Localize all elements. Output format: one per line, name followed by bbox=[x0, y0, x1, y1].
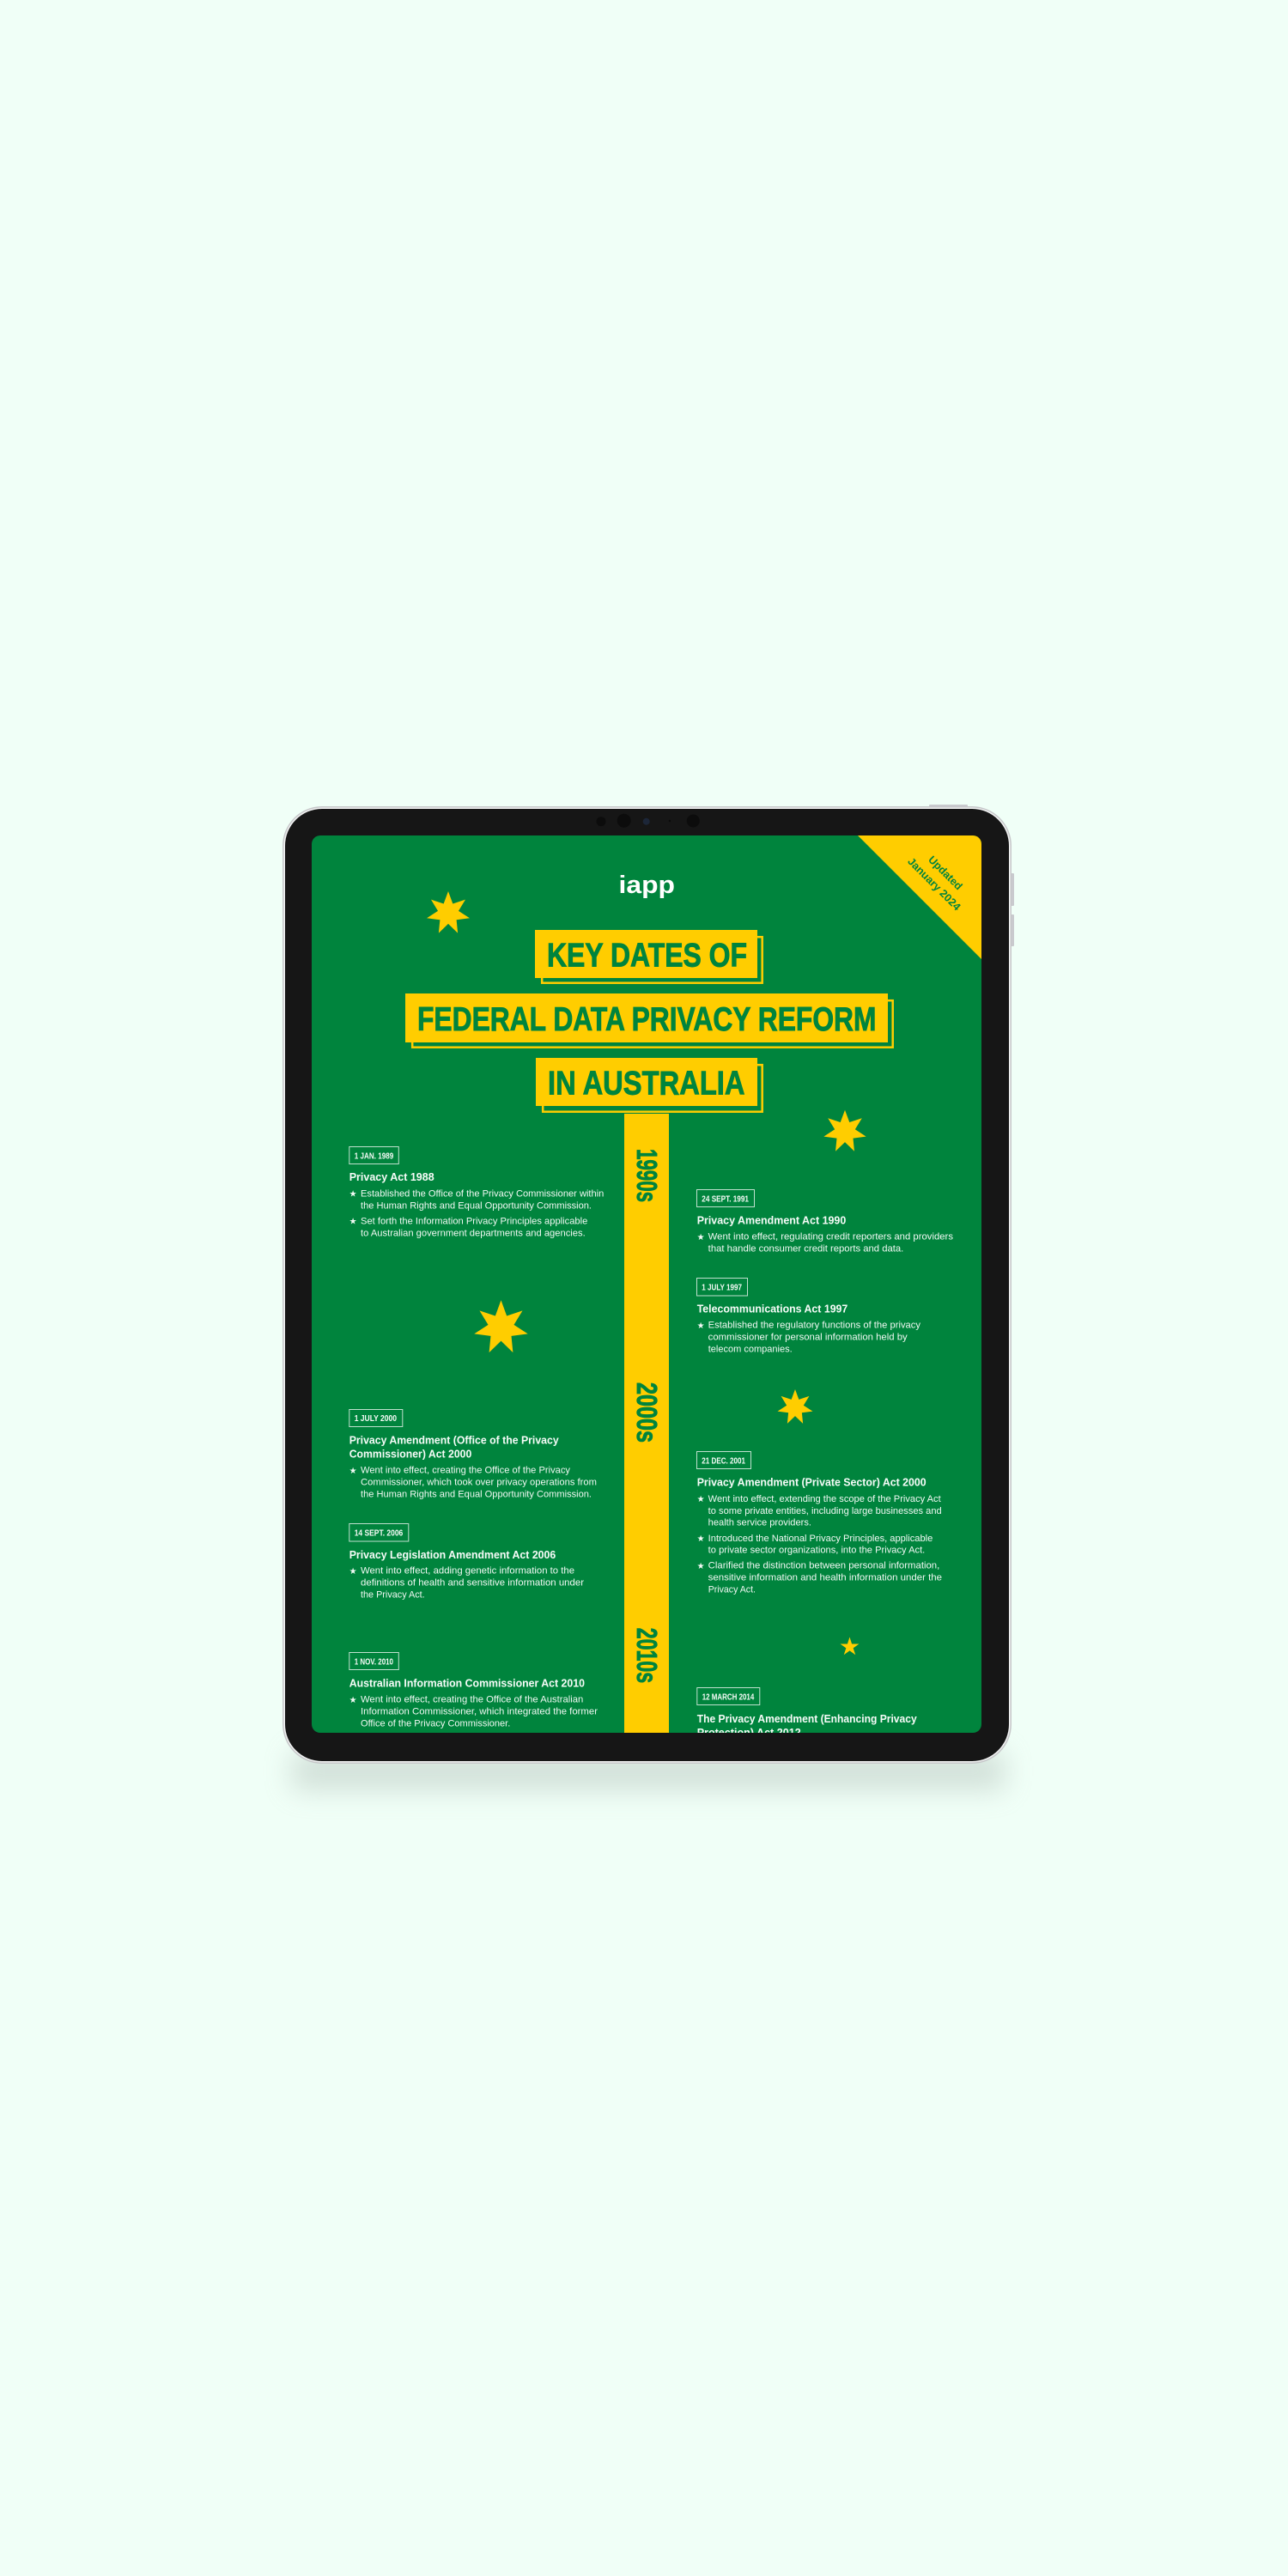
event: Privacy Act 1988: the Human Rights and Equal Opportunity Commission. bbox=[361, 1200, 592, 1211]
decade label: 1990s: 1990s bbox=[631, 1149, 663, 1202]
event: Privacy Act 1988: Set forth the Information Privacy Principles applicable bbox=[361, 1216, 587, 1226]
event: Privacy Amendment (Private Sector) Act 2000: Went into effect, extending the scope of the Privacy Act bbox=[708, 1494, 941, 1504]
event: Privacy Amendment (Private Sector) Act 2000: Privacy Act. bbox=[708, 1585, 756, 1595]
event: Privacy Act 1988: ★ bbox=[349, 1190, 357, 1199]
event: Australian Information Commissioner Act 2010: Office of the Privacy Commissioner. bbox=[361, 1718, 510, 1728]
event: Privacy Amendment Act 1990: Privacy Amendment Act 1990 bbox=[697, 1214, 846, 1227]
event: Australian Information Commissioner Act 2010: Went into effect, creating the Office of the Australian bbox=[361, 1695, 583, 1705]
corner ribbon: updated date: Updated bbox=[926, 854, 964, 892]
event: The Privacy Amendment (Enhancing Privacy Protection) Act 2012: The Privacy Amendment (Enhancing Privacy bbox=[697, 1712, 917, 1725]
logo: iapp: iapp bbox=[618, 872, 675, 899]
decade label: 2010s: 2010s bbox=[631, 1628, 663, 1683]
event: Australian Information Commissioner Act 2010 bbox=[349, 1652, 598, 1728]
event: Privacy Amendment (Private Sector) Act 2000: Introduced the National Privacy Principles, applicable bbox=[708, 1534, 933, 1544]
screen background bbox=[312, 835, 981, 1733]
event: Telecommunications Act 1997: telecom companies. bbox=[708, 1345, 793, 1355]
icon: star top left bbox=[427, 891, 470, 933]
corner ribbon: updated date bbox=[858, 835, 981, 959]
event: Telecommunications Act 1997 bbox=[697, 1278, 921, 1355]
event: Privacy Act 1988: 1 JAN. 1989 bbox=[355, 1151, 393, 1161]
event: Privacy Amendment (Private Sector) Act 2000: ★ bbox=[697, 1495, 705, 1504]
event: Australian Information Commissioner Act 2010: ★ bbox=[349, 1696, 357, 1705]
event: Privacy Amendment (Office of the Privacy Commissioner) Act 2000: ★ bbox=[349, 1467, 357, 1476]
event: Privacy Act 1988: to Australian government departments and agencies. bbox=[361, 1228, 586, 1238]
event: Privacy Amendment Act 1990: 24 SEPT. 1991 bbox=[702, 1194, 749, 1204]
event: Privacy Legislation Amendment Act 2006 bbox=[349, 1523, 584, 1601]
event: Privacy Amendment (Office of the Privacy Commissioner) Act 2000: Commissioner, which took over privacy operations from bbox=[361, 1478, 597, 1488]
event: Privacy Amendment (Office of the Privacy Commissioner) Act 2000: 1 JULY 2000 bbox=[355, 1413, 397, 1424]
title: in australia: IN AUSTRALIA bbox=[548, 1065, 745, 1102]
event: Privacy Amendment (Private Sector) Act 2000: Clarified the distinction between personal information, bbox=[708, 1561, 939, 1571]
event: Privacy Amendment (Private Sector) Act 2000: sensitive information and health information under the bbox=[708, 1573, 942, 1583]
icon: star right column bbox=[778, 1389, 812, 1424]
event: Privacy Amendment (Office of the Privacy Commissioner) Act 2000: Privacy Amendment (Office of the Privacy bbox=[349, 1434, 559, 1447]
event: The Privacy Amendment (Enhancing Privacy Protection) Act 2012: Protection) Act 2012 bbox=[697, 1726, 801, 1739]
event: Privacy Amendment (Office of the Privacy Commissioner) Act 2000: Went into effect, creating the Office of the Privacy bbox=[361, 1466, 571, 1476]
event: Privacy Legislation Amendment Act 2006: the Privacy Act. bbox=[361, 1590, 425, 1601]
event: Telecommunications Act 1997: ★ bbox=[697, 1321, 705, 1331]
event: Privacy Amendment Act 1990: that handle consumer credit reports and data. bbox=[708, 1244, 903, 1255]
screen content bbox=[312, 835, 981, 1739]
infographic page bbox=[283, 805, 1014, 1799]
event: Privacy Amendment Act 1990: ★ bbox=[697, 1233, 705, 1242]
tablet device bbox=[283, 805, 1014, 1764]
event: Telecommunications Act 1997: Telecommunications Act 1997 bbox=[697, 1303, 848, 1315]
event: Privacy Amendment (Private Sector) Act 2000: ★ bbox=[697, 1562, 705, 1571]
event: Privacy Act 1988 bbox=[349, 1147, 604, 1238]
event: Privacy Amendment Act 1990 bbox=[697, 1190, 954, 1255]
event: Telecommunications Act 1997: 1 JULY 1997 bbox=[702, 1283, 742, 1293]
event: Privacy Amendment Act 1990: Went into effect, regulating credit reporters and providers bbox=[708, 1232, 954, 1242]
side buttons bbox=[929, 805, 1014, 946]
event: Privacy Amendment (Office of the Privacy Commissioner) Act 2000: Commissioner) Act 2000 bbox=[349, 1448, 471, 1461]
event: Privacy Amendment (Private Sector) Act 2000: Privacy Amendment (Private Sector) Act 2000 bbox=[697, 1476, 927, 1489]
camera array bbox=[596, 814, 700, 828]
event: Privacy Legislation Amendment Act 2006: ★ bbox=[349, 1567, 357, 1577]
event: Privacy Amendment (Office of the Privacy Commissioner) Act 2000 bbox=[349, 1410, 597, 1500]
title: key dates of bbox=[535, 930, 762, 983]
event: Privacy Legislation Amendment Act 2006: Went into effect, adding genetic information to the bbox=[361, 1566, 574, 1577]
title: in australia bbox=[536, 1058, 762, 1112]
corner ribbon: updated date: January 2024 bbox=[905, 855, 963, 913]
title: key dates of: KEY DATES OF bbox=[547, 938, 747, 975]
event: Privacy Amendment (Private Sector) Act 2000: 21 DEC. 2001 bbox=[702, 1456, 745, 1467]
tablet frame bbox=[283, 806, 1012, 1764]
event: Privacy Act 1988: Established the Office of the Privacy Commissioner within bbox=[361, 1188, 604, 1199]
event: Privacy Legislation Amendment Act 2006: definitions of health and sensitive information under bbox=[361, 1578, 584, 1589]
event: Privacy Amendment (Private Sector) Act 2000: ★ bbox=[697, 1534, 705, 1544]
event: Privacy Amendment (Office of the Privacy Commissioner) Act 2000: the Human Rights and Equal Opportunity Commission. bbox=[361, 1490, 592, 1500]
title: federal data privacy reform: FEDERAL DATA PRIVACY REFORM bbox=[417, 1001, 876, 1038]
event: Privacy Legislation Amendment Act 2006: 14 SEPT. 2006 bbox=[355, 1528, 403, 1538]
event: The Privacy Amendment (Enhancing Privacy Protection) Act 2012: 12 MARCH 2014 bbox=[702, 1692, 754, 1702]
icon: star right of title bbox=[823, 1110, 866, 1151]
tablet shadow bbox=[292, 1752, 1005, 1790]
event: Australian Information Commissioner Act 2010: Australian Information Commissioner Act 2010 bbox=[349, 1676, 585, 1689]
icon: small five-point star bbox=[841, 1637, 859, 1655]
event: Telecommunications Act 1997: Established the regulatory functions of the privacy bbox=[708, 1321, 921, 1331]
event: Privacy Amendment (Private Sector) Act 2000: to some private entities, including large businesses and bbox=[708, 1506, 942, 1516]
event: Privacy Amendment (Private Sector) Act 2000 bbox=[697, 1451, 942, 1595]
decade label: 2000s: 2000s bbox=[631, 1382, 663, 1443]
event: Privacy Act 1988: ★ bbox=[349, 1218, 357, 1226]
event: Privacy Amendment (Private Sector) Act 2000: health service providers. bbox=[708, 1518, 811, 1528]
event: Privacy Amendment (Private Sector) Act 2000: to private sector organizations, into the Privacy Act. bbox=[708, 1546, 925, 1556]
event: Australian Information Commissioner Act 2010: Information Commissioner, which integrated the former bbox=[361, 1707, 598, 1717]
icon: star left column bbox=[474, 1300, 528, 1352]
event: The Privacy Amendment (Enhancing Privacy Protection) Act 2012 bbox=[696, 1687, 917, 1733]
title: federal data privacy reform bbox=[405, 993, 893, 1048]
event: Privacy Legislation Amendment Act 2006: Privacy Legislation Amendment Act 2006 bbox=[349, 1548, 556, 1561]
event: Privacy Act 1988: Privacy Act 1988 bbox=[349, 1170, 434, 1183]
event: Telecommunications Act 1997: commissioner for personal information held by bbox=[708, 1333, 908, 1343]
timeline stem bbox=[624, 1114, 669, 1733]
event: Australian Information Commissioner Act 2010: 1 NOV. 2010 bbox=[355, 1657, 393, 1668]
